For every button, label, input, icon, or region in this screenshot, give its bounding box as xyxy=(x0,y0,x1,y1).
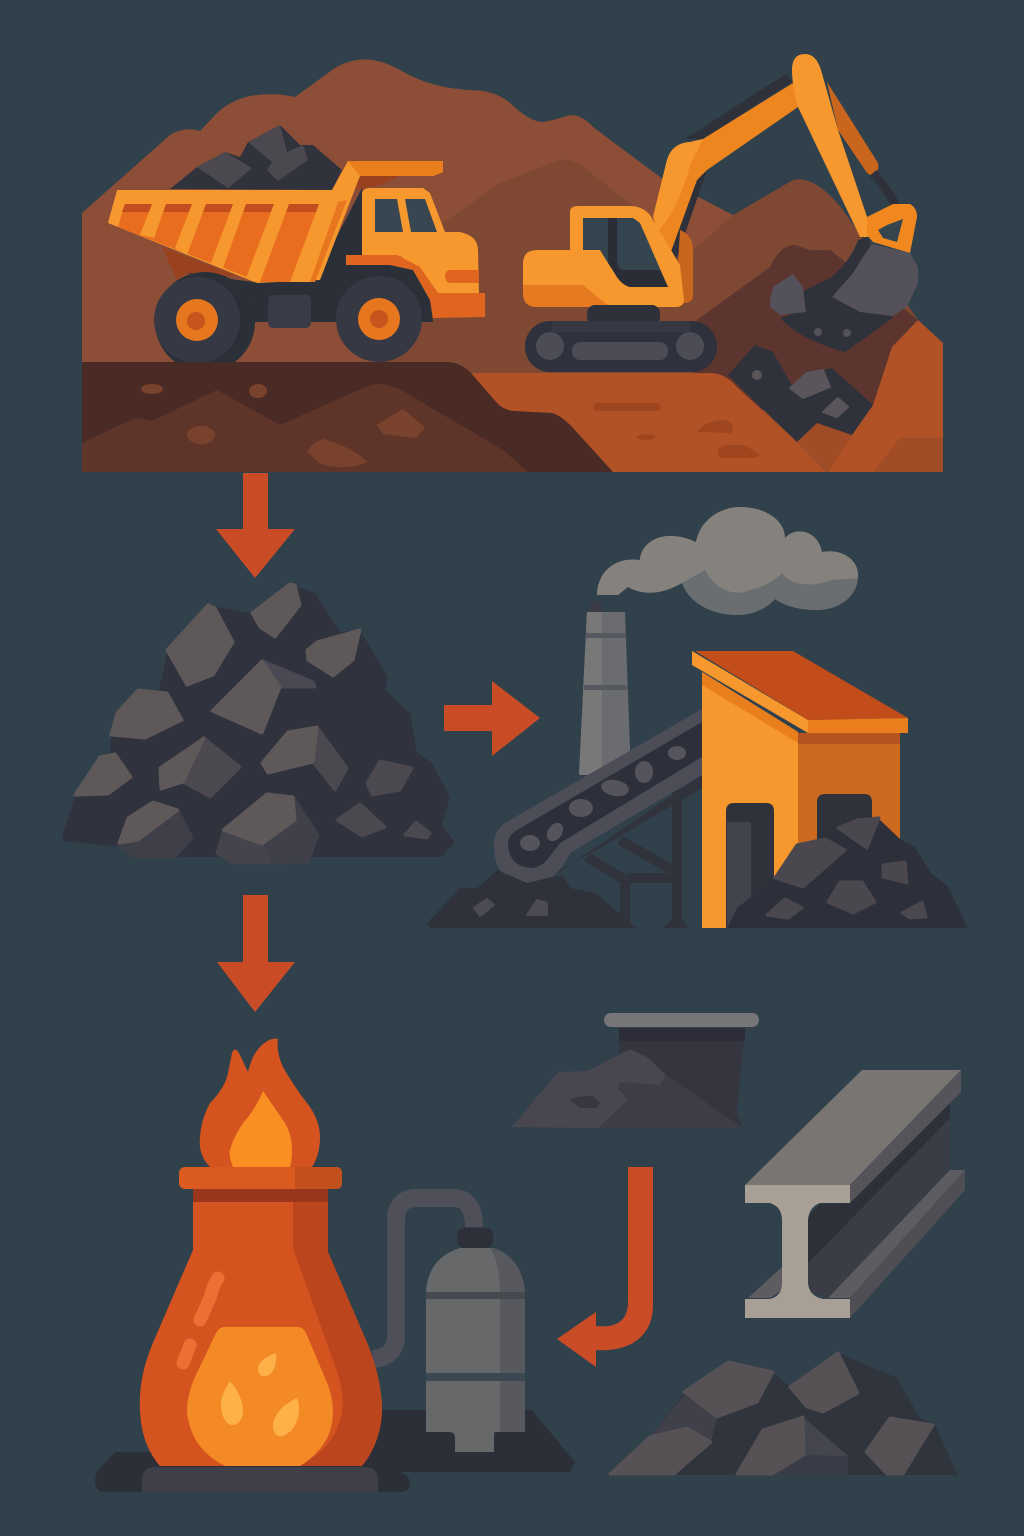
icon: steel product pile xyxy=(610,1353,958,1475)
icon: steel I-beam xyxy=(745,1070,965,1318)
icon: plant building xyxy=(692,651,908,928)
arrow: ore pile to processing plant xyxy=(444,681,540,756)
ground: dark foreground terrain xyxy=(82,362,613,472)
icon: coal under conveyor xyxy=(427,870,637,928)
arrow: mine to ore pile xyxy=(216,473,295,578)
icon: flame xyxy=(200,1039,320,1167)
icon: dump truck xyxy=(108,125,485,372)
panel: mining scene xyxy=(82,54,943,472)
icon: conveyor belt xyxy=(494,709,702,883)
icon: furnace xyxy=(140,1039,382,1492)
arrow: slag return to furnace xyxy=(557,1167,653,1367)
icon: excavator xyxy=(523,54,918,372)
icon: pipe xyxy=(373,1198,474,1359)
truck load xyxy=(170,125,342,190)
icon: ore pile xyxy=(62,584,455,863)
icon: chimney xyxy=(579,600,631,775)
icon: slag hopper xyxy=(512,1013,759,1128)
icon: ore rocks at excavator xyxy=(728,345,873,442)
icon: furnace base xyxy=(95,1410,575,1492)
arrow: ore pile to furnace xyxy=(217,895,295,1012)
icon: gas tank xyxy=(426,1228,525,1452)
icon: processing plant xyxy=(427,507,968,928)
icon: coal beside building xyxy=(727,818,968,928)
icon: smoke cloud xyxy=(597,507,858,615)
conveyor supports xyxy=(587,790,677,928)
